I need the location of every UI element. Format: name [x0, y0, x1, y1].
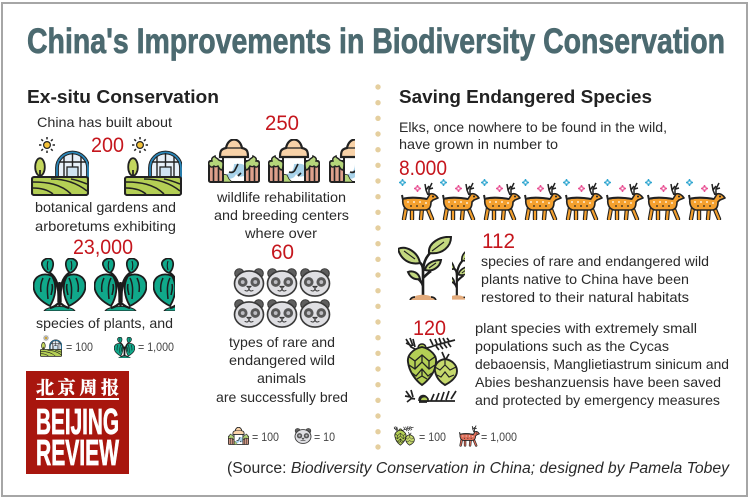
logo: Beijing Review: BEIJING [36, 401, 119, 442]
legend: center and panda units [228, 427, 335, 444]
text: botanical gardens and arboretums exhibiting: arboretums exhibiting [35, 218, 176, 234]
icon: sprout cropped [452, 251, 465, 300]
source credit: (Source: Biodiversity Conservation in China; designed by Pamela Tobey [227, 460, 730, 477]
icon: sprout [398, 237, 451, 300]
icon: rehabilitation center 2 [269, 140, 319, 182]
text: plant species with extremely small populations [475, 320, 729, 408]
legend: cone and deer units: = 100 [419, 432, 446, 444]
text: species of rare and endangered wild plants: restored to their natural habitats [481, 289, 689, 305]
legend: garden and plant units: = 1,000 [138, 342, 174, 354]
text: species of rare and endangered wild plants: species of rare and endangered wild [481, 253, 709, 269]
number: 8.000: 8.000 [399, 157, 447, 180]
icon: sun left [39, 137, 55, 153]
text: plant species with extremely small populations: populations such as the Cycas [475, 338, 669, 354]
text: plant species with extremely small populations: debaoensis, Manglietiastrum sinicum and [475, 356, 729, 372]
legend: cone and deer units [394, 426, 517, 445]
text: types of rare and endangered wild animals: are successfully bred [216, 389, 348, 405]
number: 112: 112 [482, 230, 515, 253]
icon: rehabilitation center 3 cropped [329, 139, 355, 183]
text: species of plants, and: species of plants, and [36, 315, 173, 331]
icon: rehabilitation center 1 [209, 140, 259, 182]
text: elks intro [399, 119, 667, 152]
number: 120: 120 [413, 317, 446, 340]
icons: row of eight deer [402, 183, 725, 219]
legend: cone and deer units: = 1,000 [481, 432, 517, 444]
heading: saving endangered species: Saving Endangered Species [399, 86, 652, 107]
legend: center and panda units: = 100 [252, 432, 279, 444]
text: plant species with extremely small populations: plant species with extremely small [475, 320, 697, 336]
icon: botanical garden 2 [125, 153, 181, 195]
icon: plant 1 [34, 258, 86, 311]
text: elks intro: have grown in number to [399, 136, 558, 152]
text: wildlife rehabilitation and breeding centers where over [214, 189, 349, 241]
text: wildlife rehabilitation and breeding centers where over: wildlife rehabilitation [216, 189, 346, 205]
text: botanical gardens and arboretums exhibiting: botanical gardens and [35, 199, 176, 215]
icon: sun right [132, 137, 148, 153]
text: species of rare and endangered wild plants [481, 253, 709, 305]
legend: garden and plant units [40, 335, 174, 358]
text: China has built about: China has built about [37, 114, 172, 130]
heading: ex-situ conservation: Ex-situ Conservation [27, 86, 219, 107]
text: types of rare and endangered wild animals: types of rare and [229, 334, 335, 350]
logo: Beijing Review: REVIEW [36, 432, 119, 473]
icon: botanical garden 1 [32, 153, 88, 195]
icons: sparkles above deer [399, 179, 708, 192]
number: 200: 200 [91, 134, 124, 157]
text: elks intro: Elks, once nowhere to be found in the wild, [399, 119, 667, 135]
text: plant species with extremely small populations: and protected by emergency measures [475, 392, 720, 408]
panel: ex-situ conservation [26, 86, 380, 474]
icon: plant 3 cropped [153, 258, 175, 311]
icon: plant 2 [94, 258, 146, 311]
text: species of rare and endangered wild plants: plants native to China have been [481, 271, 689, 287]
text: plant species with extremely small populations: Abies beshanzuensis have been saved [475, 374, 721, 390]
text: wildlife rehabilitation and breeding centers where over: where over [244, 225, 317, 241]
text: types of rare and endangered wild animals [216, 334, 348, 405]
number: 60: 60 [271, 241, 294, 264]
icon: fern sprig [405, 390, 456, 402]
panel: saving endangered species [394, 86, 729, 445]
text: types of rare and endangered wild animals: endangered wild [229, 352, 335, 368]
legend: garden and plant units: = 100 [66, 342, 93, 354]
icon: cones with fern [406, 338, 457, 385]
logo: Beijing Review: 北京周报 [36, 374, 119, 400]
legend: center and panda units: = 10 [314, 432, 335, 444]
number: 250: 250 [265, 112, 299, 135]
logo: Beijing Review [26, 371, 129, 474]
number: 23,000: 23,000 [73, 236, 133, 259]
text: botanical gardens and arboretums exhibiting [35, 199, 176, 234]
text: types of rare and endangered wild animals: animals [257, 370, 306, 386]
text: wildlife rehabilitation and breeding centers where over: and breeding centers [214, 207, 349, 223]
icons: six pandas [234, 269, 330, 327]
